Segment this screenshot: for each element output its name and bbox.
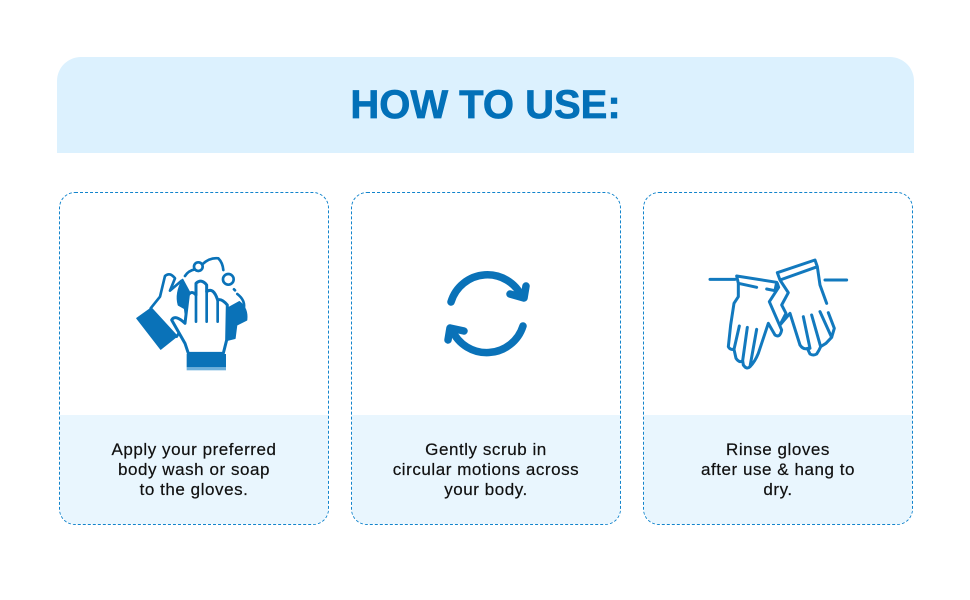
caption band: step 1	[60, 415, 328, 524]
caption band: step 3	[644, 415, 912, 524]
text: step 1: to the gloves.	[140, 480, 248, 499]
text: step 3: after use & hang to	[701, 460, 855, 479]
panel: step 2 scrub	[351, 192, 621, 525]
text: step 3	[701, 440, 855, 499]
icon: gloves hanging on a line	[710, 260, 847, 368]
header banner	[57, 57, 914, 153]
panel: step 3 rinse and dry	[643, 192, 913, 525]
text: step 1: Apply your preferred	[111, 440, 277, 459]
text: step 1: body wash or soap	[118, 460, 270, 479]
title: HOW TO USE:	[350, 83, 621, 127]
text: step 2: your body.	[444, 480, 528, 499]
text: step 2: circular motions across	[393, 460, 579, 479]
text: step 3: dry.	[763, 480, 793, 499]
text: step 2	[393, 440, 579, 499]
icon: soapy hands	[137, 258, 247, 370]
text: step 2: Gently scrub in	[425, 440, 547, 459]
icon: circular arrows	[448, 275, 526, 353]
panel: step 1 apply soap	[59, 192, 329, 525]
text: step 1	[111, 440, 277, 499]
caption band: step 2	[352, 415, 620, 524]
text: step 3: Rinse gloves	[726, 440, 830, 459]
